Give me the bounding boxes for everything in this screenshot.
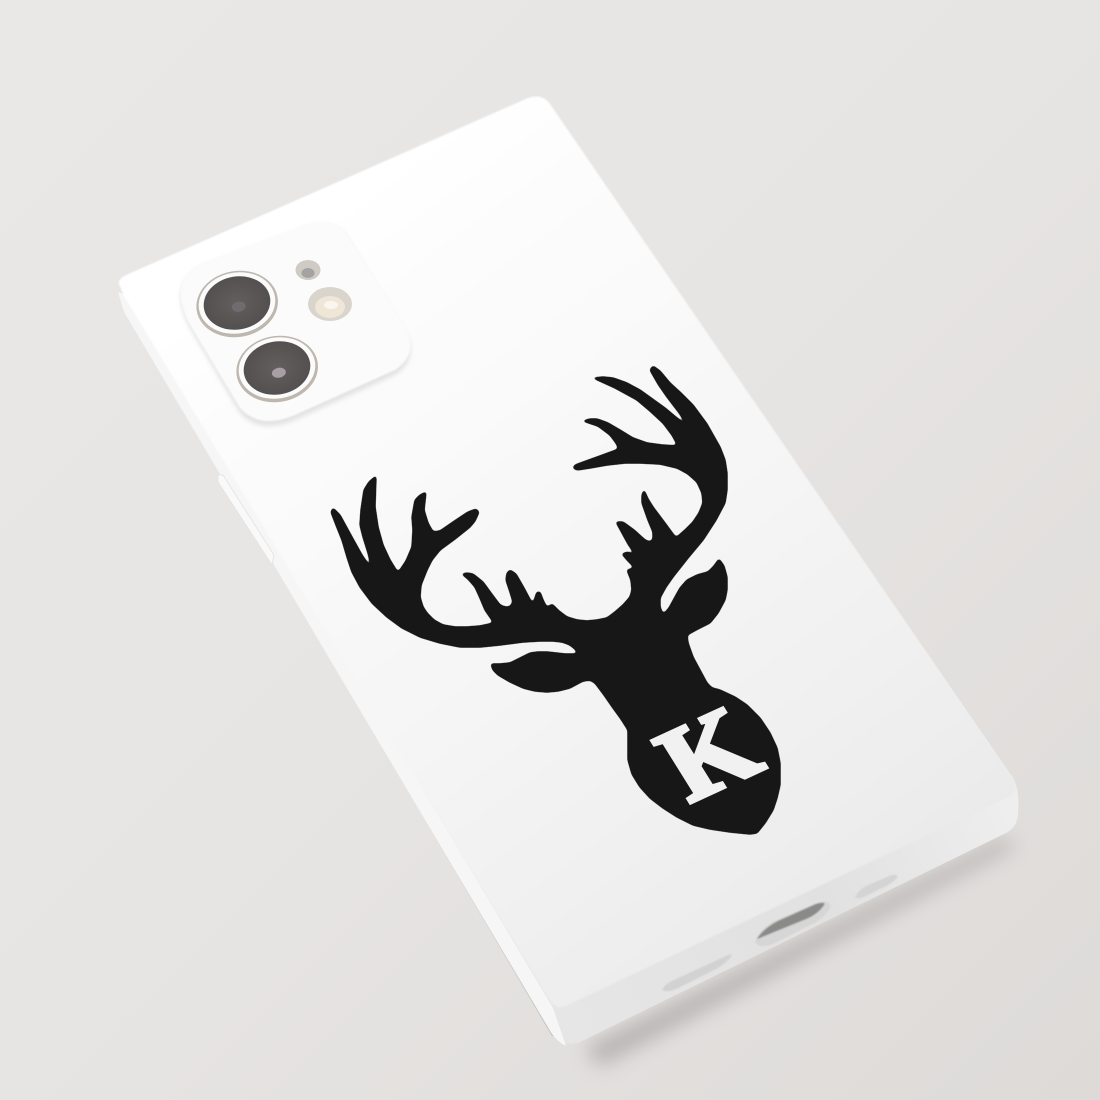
lens two: [231, 329, 323, 409]
case body and side walls: [118, 96, 1018, 1044]
microphone dot: [296, 260, 320, 280]
side button: [218, 475, 274, 565]
left side wall highlight: [118, 292, 566, 1046]
phone case: [118, 96, 1018, 1046]
top face of case: [119, 96, 1015, 1007]
lens one: [191, 264, 283, 344]
charging port recess: [755, 902, 830, 946]
bottom right speaker port: [855, 875, 897, 898]
contact line along left edge: [250, 520, 553, 1036]
drop shadow under phone: [585, 838, 1015, 1066]
flash: [308, 287, 352, 321]
camera bump: [181, 222, 411, 421]
deer head logo: [331, 366, 780, 834]
camera module: [181, 222, 411, 426]
deer silhouette: [331, 366, 780, 834]
charging port opening: [757, 903, 824, 939]
camera bump shadow: [181, 225, 411, 426]
letter K monogram: K: [637, 684, 780, 823]
bottom charging port: [755, 902, 830, 946]
bottom left speaker port: [662, 954, 732, 991]
